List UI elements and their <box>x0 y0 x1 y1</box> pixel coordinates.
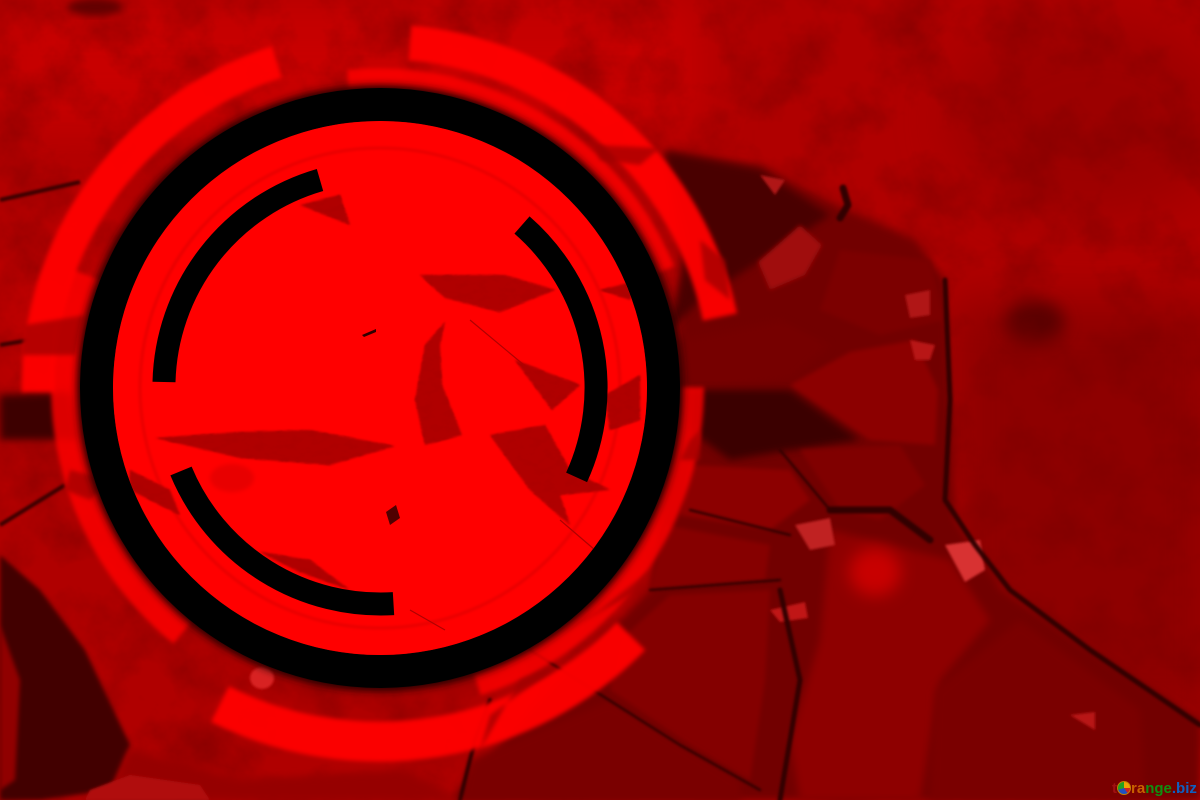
arc: middle lower right <box>477 387 692 684</box>
arc: inner bottom left <box>181 471 394 604</box>
crack: horizontal left <box>155 430 395 465</box>
arc: inner upper left <box>164 180 320 382</box>
dark cracks <box>460 188 1200 800</box>
cracks showing through outer arcs <box>22 145 730 750</box>
crack: vertical centre <box>415 322 462 445</box>
crack: top <box>300 195 350 225</box>
arc: outer bottom <box>220 636 631 742</box>
arc: middle upper right <box>348 78 665 270</box>
watermark: t range.biz <box>1112 780 1197 797</box>
arc: inner right <box>522 225 596 477</box>
background: dark broken rock area on the right <box>450 150 1200 800</box>
rock highlights <box>945 540 985 582</box>
arc: outer upper right <box>410 43 720 317</box>
arc: outer upper left <box>38 62 277 392</box>
crack: lower right <box>490 425 610 525</box>
crack: right <box>515 360 580 410</box>
outer ring arcs <box>38 43 720 742</box>
inner black arc segments <box>164 180 596 604</box>
arc: middle left <box>66 275 183 632</box>
inner red disc with cracks <box>113 121 647 655</box>
background: dark rock bottom-left <box>0 0 460 800</box>
crack: upper right <box>420 275 555 312</box>
stone slabs <box>758 225 822 290</box>
main black ring <box>94 102 666 674</box>
